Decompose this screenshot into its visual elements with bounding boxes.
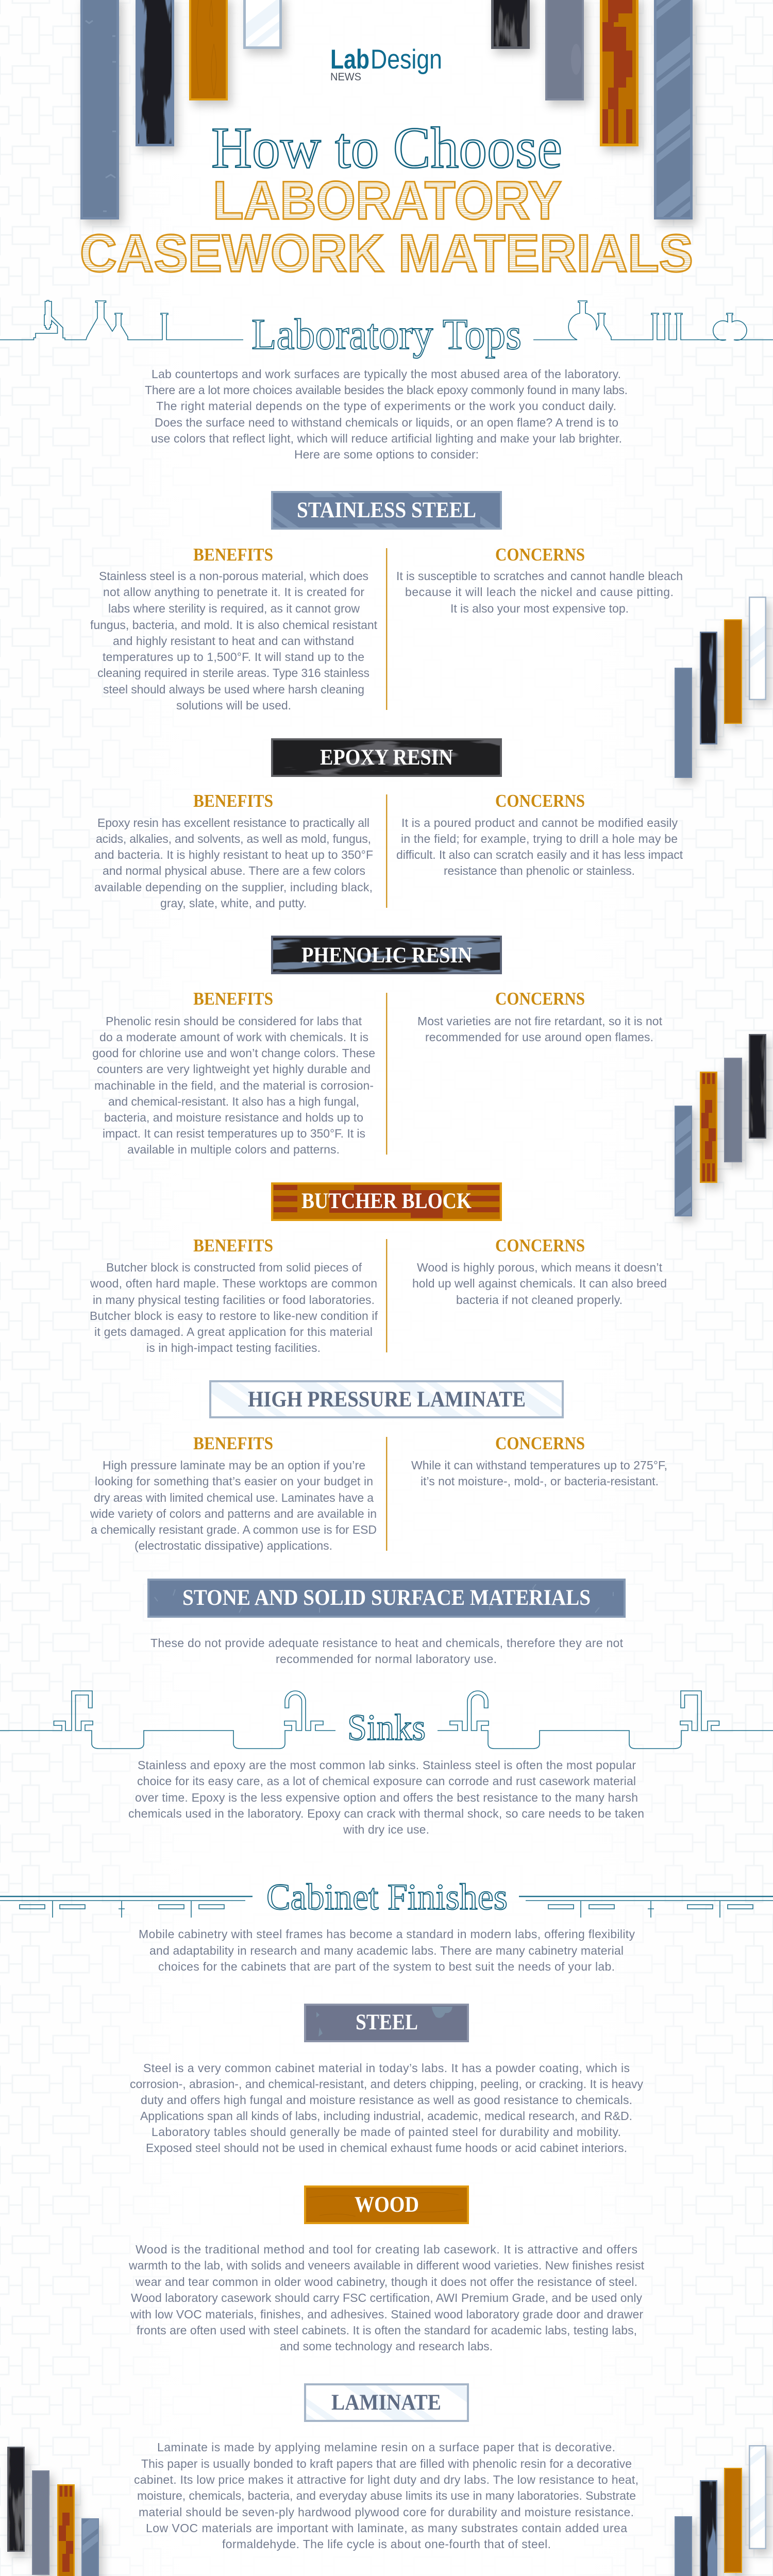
heading: Laboratory Tops: Laboratory Tops [251,310,522,359]
sinks text: Stainless and epoxy are the most common lab sinks. Stainless steel is often the most popular [138,1758,636,1772]
benefits text: cleaning required in sterile areas. Type 316 stainless [97,666,369,680]
banner: epoxy resin: EPOXY RESIN [320,745,453,770]
benefits text: Epoxy resin has excellent resistance to practically all [97,816,369,829]
banner: wood: WOOD [355,2193,419,2217]
benefits text: bacteria, and moisture resistance and holds up to [104,1111,363,1124]
intro text: Does the surface need to withstand chemicals or liquids, or an open flame? A trend is to [155,416,618,429]
panel: steel [130,2004,643,2155]
benefits text: counters are very lightweight yet highly durable and [97,1062,371,1076]
wood text [128,2243,645,2353]
benefits text: (electrostatic dissipative) applications. [135,1539,332,1552]
cabinet intro text [139,1927,635,1973]
laminate text [134,2441,638,2551]
steel text: Exposed steel should not be used in chemical exhaust fume hoods or acid cabinet interiors. [146,2141,627,2155]
banner: stone and solid surface [147,1579,626,1618]
benefits text: gray, slate, white, and putty. [160,896,307,910]
decorative bars: bottom left [7,2447,99,2576]
benefits heading: BENEFITS [193,989,273,1009]
concerns text: in the field; for example, trying to drill a hole may be [401,832,678,845]
steel text: Laboratory tables should generally be made of painted steel for durability and mobility. [152,2125,621,2139]
benefits text: available depending on the supplier, including black, [94,880,373,894]
wood text: with low VOC materials, finishes, and adhesives. Stained wood laboratory grade door and drawer [130,2308,643,2321]
benefits text: looking for something that’s easier on your budget in [95,1475,373,1488]
intro text: use colors that reflect light, which will reduce artificial lighting and make your lab brighter. [151,432,622,445]
banner: high pressure laminate: HIGH PRESSURE LAMINATE [248,1387,526,1412]
concerns heading: CONCERNS [495,791,585,811]
banner: stainless steel: STAINLESS STEEL [297,498,476,522]
concerns text: recommended for use around open flames. [425,1030,653,1044]
panel: epoxy resin [94,738,683,910]
concerns text: hold up well against chemicals. It can also breed [412,1277,667,1290]
concerns text: bacteria if not cleaned properly. [456,1293,623,1307]
banner: stone and solid surface: STONE AND SOLID SURFACE MATERIALS [182,1586,591,1610]
stone text [150,1636,624,1666]
benefits text: labs where sterility is required, as it cannot grow [108,602,360,615]
benefits text [90,1261,378,1354]
panel: stainless steel [90,491,683,712]
title [80,116,693,283]
concerns text: it’s not moisture-, mold-, or bacteria-resistant. [421,1475,659,1488]
steel text [130,2061,643,2155]
banner: steel: STEEL [356,2010,418,2035]
concerns text: It is also your most expensive top. [450,602,629,615]
benefits heading: BENEFITS [193,1433,273,1453]
sinks text [128,1758,644,1836]
sinks text: with dry ice use. [343,1823,429,1836]
panel: laminate [134,2383,638,2551]
banner: butcher block [271,1182,502,1221]
top material bars left [80,0,282,219]
intro text: There are a lot more choices available besides the black epoxy commonly found in many labs. [145,383,628,397]
steel text: corrosion-, abrasion-, and chemical-resistant, and deters chipping, peeling, or cracking. It is heavy [130,2077,643,2091]
concerns text: It is susceptible to scratches and cannot handle bleach [396,569,683,583]
heading: Sinks: Sinks [347,1707,426,1748]
concerns text: difficult. It also can scratch easily and it has less impact [396,848,683,861]
benefits text [90,1459,377,1552]
banner: laminate [304,2383,469,2422]
banner: butcher block: BUTCHER BLOCK [301,1189,472,1213]
sinks text: choice for its easy care, as a lot of chemical exposure can corrode and rust casework material [137,1774,636,1788]
laminate text: formaldehyde. The life cycle is about one-fourth that of steel. [222,2537,551,2551]
concerns heading: CONCERNS [495,989,585,1009]
logo: Lab [330,44,369,75]
benefits text: a chemically resistant grade. A common use is for ESD [91,1523,377,1536]
panel: high pressure laminate [90,1380,667,1552]
concerns text: resistance than phenolic or stainless. [444,864,635,877]
laminate text: Low VOC materials are important with laminate, as many substrates contain added urea [146,2521,627,2535]
stone text: recommended for normal laboratory use. [276,1652,497,1666]
benefits text: is in high-impact testing facilities. [146,1341,321,1354]
concerns text [396,569,683,615]
heading: Cabinet Finishes: Cabinet Finishes [266,1876,508,1918]
benefits text: not allow anything to penetrate it. It is created for [103,585,364,599]
banner: stainless steel [271,491,502,530]
laminate text: material should be seven-ply hardwood plywood core for durability and moisture resistance. [139,2505,634,2519]
benefits heading: BENEFITS [193,1235,273,1256]
intro text [145,367,628,461]
benefits text: wood, often hard maple. These worktops are common [90,1277,377,1290]
logo: NEWS [330,71,361,83]
benefits text [90,569,378,712]
benefits text: and normal physical abuse. There are a few colors [103,864,365,877]
cabinet intro text: choices for the cabinets that are part of the system to best suit the needs of your lab. [158,1960,615,1973]
benefits text: wide variety of colors and patterns and are available in [90,1507,377,1520]
steel text: Applications span all kinds of labs, including industrial, academic, medical research, and R&D. [140,2109,632,2123]
benefits text: and highly resistant to heat and can withstand [113,634,354,648]
concerns text [396,816,683,877]
benefits text: machinable in the field, and the material is corrosion- [94,1079,374,1092]
benefits text: acids, alkalies, and solvents, as well as mold, fungus, [96,832,371,845]
logo [330,44,442,83]
lab glassware line art [0,300,773,341]
concerns text: because it will leach the nickel and cause pitting. [405,585,674,599]
sinks text: chemicals used in the laboratory. Epoxy can crack with thermal shock, so care needs to be taken [128,1807,644,1820]
concerns text [411,1459,667,1488]
stone text: These do not provide adequate resistance to heat and chemicals, therefore they are not [150,1636,624,1650]
banner: phenolic resin [271,936,502,974]
banner: high pressure laminate [209,1380,564,1418]
banner: wood [304,2185,469,2224]
banner: phenolic resin: PHENOLIC RESIN [301,943,472,968]
logo: Design [371,44,442,75]
cabinet line art [0,1896,773,1918]
laminate text: cabinet. Its low price makes it attractive for light duty and dry labs. The low resistance to heat, [134,2473,638,2486]
benefits text: steel should always be used where harsh cleaning [103,683,364,696]
concerns heading: CONCERNS [495,1235,585,1256]
benefits text: Butcher block is easy to restore to like-new condition if [90,1309,378,1323]
intro text: Lab countertops and work surfaces are typically the most abused area of the laboratory. [152,367,621,381]
title: CASEWORK MATERIALS [80,224,693,283]
benefits text: fungus, bacteria, and mold. It is also chemical resistant [90,618,378,632]
steel text: Steel is a very common cabinet material in today’s labs. It has a powder coating, which is [143,2061,630,2075]
banner: laminate: LAMINATE [331,2391,441,2415]
concerns text: Wood is highly porous, which means it doesn’t [417,1261,663,1274]
sink line art [0,1691,773,1749]
benefits text [94,816,373,910]
benefits text: impact. It can resist temperatures up to 350°F. It is [103,1127,365,1140]
benefits text: Stainless steel is a non-porous material, which does [99,569,368,583]
decorative bars: group 2 [675,1034,766,1216]
concerns text: It is a poured product and cannot be modified easily [401,816,678,829]
laminate text: moisture, chemicals, bacteria, and everyday abuse limits its use in many laboratories. Substrate [137,2489,636,2502]
intro text: The right material depends on the type of experiments or the work you conduct daily. [156,399,616,413]
benefits text: and chemical-resistant. It also has a high fungal, [108,1095,359,1108]
benefits text: in many physical testing facilities or food laboratories. [93,1293,375,1307]
concerns heading: CONCERNS [495,545,585,565]
benefits text: available in multiple colors and patterns. [127,1143,340,1156]
wood text: Wood laboratory casework should carry FSC certification, AWI Premium Grade, and be used only [131,2291,642,2304]
intro text: Here are some options to consider: [294,448,479,461]
benefits text: Phenolic resin should be considered for labs that [106,1014,362,1028]
panel: wood [128,2185,645,2353]
benefits text [92,1014,375,1156]
concerns text [417,1014,663,1044]
decorative bars: bottom right [675,2445,766,2576]
laminate text: Laminate is made by applying melamine resin on a surface paper that is decorative. [157,2441,615,2454]
concerns heading: CONCERNS [495,1433,585,1453]
banner: epoxy resin [271,738,502,777]
benefits text: and bacteria. It is highly resistant to heat up to 350°F [94,848,373,861]
wood text: warmth to the lab, with solids and veneers available in different wood varieties. New finishes resist [128,2259,645,2272]
sinks text: over time. Epoxy is the less expensive option and offers the best resistance to the many harsh [135,1791,638,1804]
concerns text [412,1261,667,1307]
wood text: and some technology and research labs. [280,2340,493,2353]
benefits heading: BENEFITS [193,791,273,811]
benefits text: good for chlorine use and won’t change colors. These [92,1046,375,1060]
benefits text: solutions will be used. [176,699,291,712]
steel text: duty and offers high fungal and moisture resistance as well as good resistance to chemicals. [141,2093,632,2107]
wood text: wear and tear common in older wood cabinetry, though it does not offer the resistance of steel. [135,2275,637,2289]
panel: butcher block [90,1182,667,1354]
cabinet intro text: Mobile cabinetry with steel frames has become a standard in modern labs, offering flexibility [139,1927,635,1941]
benefits text: temperatures up to 1,500°F. It will stand up to the [103,650,364,664]
benefits text: do a moderate amount of work with chemicals. It is [99,1030,368,1044]
decorative bars: group 1 [675,597,766,778]
title: How to Choose [211,116,562,180]
benefits heading: BENEFITS [193,545,273,565]
panel: phenolic resin [92,936,663,1156]
concerns text: Most varieties are not fire retardant, so it is not [417,1014,663,1028]
banner: steel [304,2004,469,2042]
wood text: Wood is the traditional method and tool for creating lab casework. It is attractive and offers [136,2243,637,2256]
benefits text: Butcher block is constructed from solid pieces of [106,1261,362,1274]
title: LABORATORY [213,171,562,231]
benefits text: it gets damaged. A great application for this material [94,1325,373,1338]
benefits text: dry areas with limited chemical use. Laminates have a [94,1491,374,1504]
cabinet intro text: and adaptability in research and many academic labs. There are many cabinetry material [149,1944,624,1957]
laminate text: This paper is usually bonded to kraft papers that are filled with phenolic resin for a decorative [141,2457,632,2470]
top material bars right [491,0,693,219]
benefits text: High pressure laminate may be an option if you’re [103,1459,365,1472]
panel: stone and solid surface [147,1579,626,1666]
concerns text: While it can withstand temperatures up to 275°F, [411,1459,667,1472]
wood text: fronts are often used with steel cabinets. It is often the standard for academic labs, testing labs, [137,2324,637,2337]
